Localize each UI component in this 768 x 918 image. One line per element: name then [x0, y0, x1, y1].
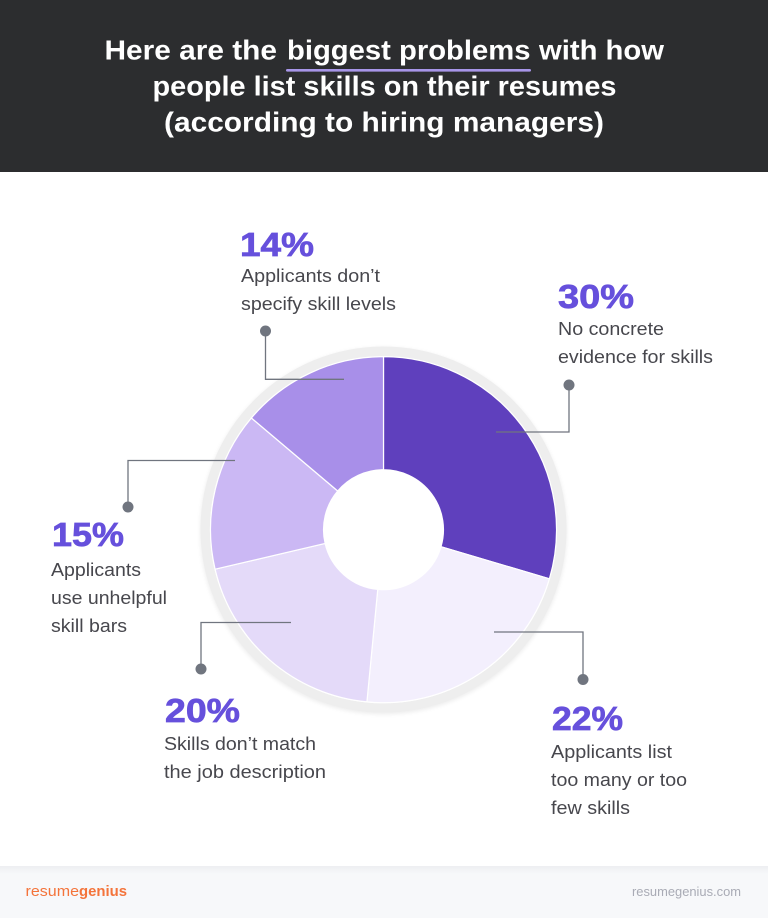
callout: 15%: skill bars: [51, 616, 127, 636]
callout: 30%: No concrete: [558, 319, 664, 339]
callout: 22%: too many or too: [551, 770, 687, 790]
callout: 15%: Applicants: [51, 560, 141, 580]
callout: 22%: few skills: [551, 798, 630, 818]
website url: resumegenius.com: [632, 884, 741, 899]
callout: 20%: [164, 622, 326, 782]
callout: 22%: [494, 632, 687, 818]
header panel: [0, 0, 768, 172]
title: biggest problems: [287, 34, 530, 66]
callout: 30%: [496, 278, 713, 432]
title: people list skills on their resumes: [152, 70, 616, 102]
callout: 22%: 22%: [552, 700, 623, 737]
logo: resumegenius: [26, 883, 127, 900]
logo: resumegenius: genius: [79, 883, 127, 900]
callout: 20%: the job description: [164, 762, 326, 782]
callout: 14%: [240, 226, 396, 379]
callout: 15%: 15%: [52, 516, 124, 553]
title: (according to hiring managers): [164, 106, 604, 138]
callout: 20%: Skills don’t match: [164, 734, 316, 754]
callout: 30%: evidence for skills: [558, 347, 713, 367]
callout: 15%: use unhelpful: [51, 588, 167, 608]
callout: 14%: Applicants don’t: [241, 266, 380, 286]
callout: 20%: 20%: [165, 692, 240, 729]
donut chart: [200, 346, 566, 714]
title: Here are the: [104, 34, 277, 66]
callout: 22%: Applicants list: [551, 742, 672, 762]
title: with how: [538, 34, 665, 66]
callout: 30%: 30%: [558, 278, 634, 315]
logo: resumegenius: resume: [26, 883, 79, 900]
footer panel: [0, 866, 768, 918]
callout: 15%: [51, 460, 235, 636]
callout: 14%: 14%: [240, 226, 314, 263]
title: [104, 34, 665, 138]
callout: 14%: specify skill levels: [241, 294, 396, 314]
